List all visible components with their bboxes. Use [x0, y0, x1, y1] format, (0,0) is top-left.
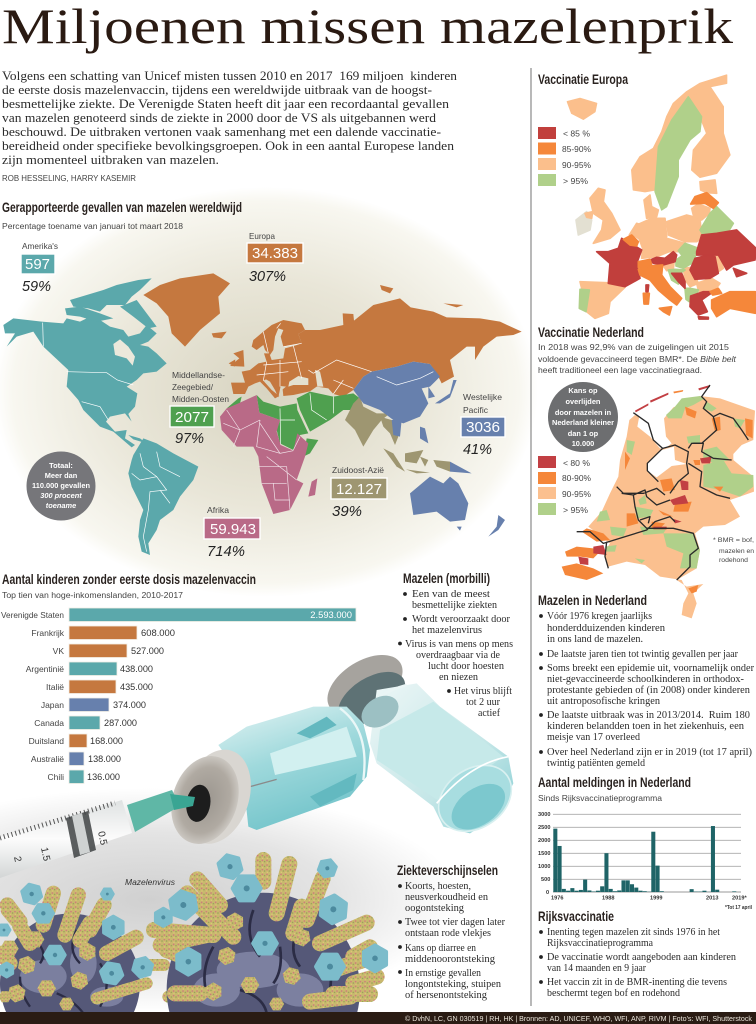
bullets: Mazelen in Nederland: in ons land de mazelen.: [547, 634, 643, 645]
region: Zuidoost-Azië: 39%: [332, 504, 362, 520]
callout: totaal: toename: [46, 501, 76, 510]
bullets: Rijksvaccinatie: Het vaccin zit in de BMR-inenting die tevens: [547, 977, 727, 988]
bullets: ziekteverschijnselen: Twee tot vier dagen later: [405, 917, 505, 928]
map: Continental Europe: [576, 180, 756, 319]
map background glow: [0, 187, 538, 597]
callout: sterftekans: [548, 382, 618, 452]
footnote: BMR: rodehond: [719, 557, 748, 564]
footer: © DvhN, LC, GN 030519 | RH, HK | Bronnen: AD, UNICEF, WHO, WFI, ANP, RIVM | Foto's: WFI, Shutterstock: [405, 1015, 752, 1023]
heading: world map: Gerapporteerde gevallen van mazelen wereldwijd: [2, 199, 242, 215]
region: Afrika: 59.943: [210, 522, 256, 538]
intro text: besmettelijke ziekte. De Verenigde Staten heeft dit jaar een recordaantal gevallen: [2, 97, 449, 111]
legend: Europe: > 95%: [563, 176, 588, 186]
footnote: BMR: mazelen en: [719, 548, 754, 555]
region: Zuidoost-Azië: [331, 465, 387, 520]
column chart: [538, 812, 752, 911]
country labels: Canada: [34, 718, 64, 728]
country labels: Japan: [41, 700, 64, 710]
region: Afrika: Afrika: [207, 505, 229, 515]
panel: Mazelen (morbilli): [398, 570, 513, 719]
bullets: Mazelen in Nederland: meisje van 17 overleed: [547, 732, 641, 743]
column chart: 2500: [538, 825, 550, 831]
bar values: 438.000: [120, 663, 153, 674]
country labels: Verenigde Staten: [1, 610, 64, 620]
bullets: Mazelen in Nederland: honderdduizenden kinderen: [547, 623, 666, 634]
bar values: [87, 609, 352, 782]
panel: bar chart: [1, 571, 356, 784]
illustration: syringe: 0.5: [95, 830, 109, 847]
intro text: Volgens een schatting van Unicef misten tussen 2010 en 2017 169 miljoen kinderen: [2, 69, 457, 83]
bullets: morbilli: overdraagbaar via de: [416, 650, 500, 661]
legend: Netherlands: 80-90%: [562, 473, 591, 483]
legend: Netherlands: [538, 456, 591, 515]
world map regions: [3, 273, 522, 555]
illustration: vial, front: [160, 707, 370, 853]
illustration: measles virus, right: [151, 853, 386, 1013]
bar values: 435.000: [120, 681, 153, 692]
bar values: 374.000: [113, 699, 146, 710]
callout: totaal: 110.000 gevallen: [32, 481, 90, 490]
bullets: ziekteverschijnselen: In ernstige gevallen: [405, 968, 482, 979]
bar values: 287.000: [104, 717, 137, 728]
panel: world map: [2, 199, 522, 560]
region: Amerika's: [21, 241, 58, 295]
bullets: ziekteverschijnselen: longontsteking, stuipen: [405, 979, 502, 990]
bullets: Rijksvaccinatie: Inenting tegen mazelen zit sinds 1976 in het: [547, 927, 720, 938]
callout: totaal: [26, 452, 96, 520]
footnote: BMR: [713, 537, 754, 564]
column chart: 2013: [706, 896, 718, 902]
country labels: Australië: [31, 754, 64, 764]
heading: ziekteverschijnselen: Ziekteverschijnselen: [397, 862, 498, 878]
illustration: syringe: [0, 790, 195, 878]
photo background shadow: [0, 788, 460, 1012]
region: Europa: 307%: [249, 269, 286, 285]
panel: Aantal meldingen: [538, 774, 752, 911]
country labels: Italië: [46, 682, 64, 692]
bullets: Rijksvaccinatie: De vaccinatie wordt aangeboden aan kinderen: [547, 952, 737, 963]
region: Europa: Europa: [249, 231, 275, 241]
bullets: morbilli: Een van de meest: [412, 589, 490, 600]
column chart: *Tot 17 april: [725, 905, 752, 911]
region: Westelijke Pacific: 41%: [463, 442, 492, 458]
illustration: vial, back: [317, 643, 524, 845]
callout: sterftekans: overlijden: [566, 397, 601, 406]
region: Westelijke Pacific: Pacific: [463, 405, 489, 415]
callout: sterftekans: Nederland kleiner: [552, 418, 614, 427]
column chart: 1976: [551, 896, 563, 902]
region: Middellandse-Zeegebied/Midden-Oosten: Midden-Oosten: [172, 394, 229, 404]
footnote: BMR: * BMR = bof,: [713, 537, 754, 544]
bullets: Mazelen in Nederland: De laatste uitbraak was in 2013/2014. Ruim 180: [547, 710, 750, 721]
region: Afrika: 714%: [207, 544, 245, 560]
bullets: morbilli: Het virus blijft: [454, 686, 512, 697]
region: Europa: 34.383: [252, 246, 298, 262]
illustration: measles virus, left: [0, 883, 200, 1013]
region: Westelijke Pacific: [461, 392, 505, 458]
subheading: Aantal meldingen: Sinds Rijksvaccinatieprogramma: [538, 793, 662, 803]
map: Netherlands: [562, 385, 755, 618]
legend: Europe: 85-90%: [562, 144, 591, 154]
bullets: morbilli: Wordt veroorzaakt door: [412, 614, 510, 625]
legend: Europe: 90-95%: [562, 160, 591, 170]
bar values: 168.000: [90, 735, 123, 746]
heading: morbilli: Mazelen (morbilli): [403, 570, 490, 586]
callout: totaal: Totaal:: [49, 461, 73, 470]
bullets: Mazelen in Nederland: twintig patiënten gemeld: [547, 758, 646, 769]
intro text: [2, 69, 457, 167]
callout: sterftekans: Kans op: [568, 386, 598, 395]
bar values: 527.000: [131, 645, 164, 656]
intro text: bereidheid onder specifieke bevolkingsgroepen. Ook in een aantal Europese landen: [2, 139, 454, 153]
region: Amerika's: 59%: [22, 279, 51, 295]
column chart: 2019*: [732, 896, 747, 902]
country labels: Argentinië: [26, 664, 64, 674]
bullets: morbilli: tot 2 uur: [466, 697, 500, 708]
bullets: morbilli: Virus is van mens op mens: [405, 639, 513, 650]
label: mazelenvirus: Mazelenvirus: [125, 878, 175, 887]
callout: totaal: Meer dan: [45, 471, 78, 480]
heading: Aantal meldingen: Aantal meldingen in Nederland: [538, 774, 691, 790]
column chart: 500: [541, 877, 550, 883]
bullets: morbilli: [398, 589, 513, 719]
bar values: 138.000: [88, 753, 121, 764]
bullets: Rijksvaccinatie: [539, 927, 737, 999]
heading: Vaccinatie Nederland: Vaccinatie Nederland: [538, 324, 644, 340]
bullets: morbilli: lucht door hoesten: [428, 661, 505, 672]
bullets: ziekteverschijnselen: Kans op diarree en: [405, 943, 477, 954]
column chart: 3000: [538, 812, 550, 818]
panel: Vaccinatie Europa: [538, 71, 756, 319]
footer: [0, 1012, 756, 1024]
region: Westelijke Pacific: 3036: [466, 420, 500, 436]
heading: Vaccinatie Europa: Vaccinatie Europa: [538, 71, 628, 87]
legend: Netherlands: > 95%: [563, 505, 588, 515]
bullets: ziekteverschijnselen: oogontsteking: [405, 903, 465, 914]
bullets: ziekteverschijnselen: ontstaan rode vlekjes: [405, 928, 491, 939]
legend: Netherlands: < 80 %: [563, 458, 590, 468]
bullets: Mazelen in Nederland: [539, 611, 754, 769]
bullets: Mazelen in Nederland: Over heel Nederland zijn er in 2019 (tot 17 april): [547, 747, 752, 758]
callout: sterftekans: door mazelen in: [555, 408, 612, 417]
panel: Rijksvaccinatie: [538, 908, 737, 999]
panel: Vaccinatie Nederland: [538, 324, 755, 618]
bullets: Mazelen in Nederland: niet-gevaccineerde schoolkinderen in orthodox-: [547, 674, 744, 685]
region: Middellandse-Zeegebied/Midden-Oosten: 97%: [175, 431, 204, 447]
bullets: Mazelen in Nederland: uit antroposofische kringen: [547, 696, 661, 707]
bullets: morbilli: actief: [478, 708, 500, 719]
bullets: Mazelen in Nederland: kinderen belandden toen in het ziekenhuis, een: [547, 721, 745, 732]
region: Westelijke Pacific: Westelijke: [463, 392, 502, 402]
country labels: [1, 610, 65, 782]
region: Middellandse-Zeegebied/Midden-Oosten: 2077: [175, 410, 209, 426]
intro text: zijn momenteel uitbraken van mazelen.: [2, 153, 219, 167]
bullets: morbilli: het mazelenvirus: [412, 625, 482, 636]
illustration: syringe: 2: [11, 855, 23, 863]
country labels: Duitsland: [29, 736, 64, 746]
region: Amerika's: Amerika's: [22, 241, 58, 251]
bullets: morbilli: en niezen: [439, 672, 479, 683]
region: Europa: [247, 231, 303, 285]
bullets: ziekteverschijnselen: neusverkoudheid en: [405, 892, 489, 903]
bullets: Mazelen in Nederland: Soms breekt een epidemie uit, voornamelijk onder: [547, 663, 754, 674]
subheading: bar chart: Top tien van hoge-inkomenslanden, 2010-2017: [2, 590, 183, 600]
column chart: 1999: [650, 896, 662, 902]
intro text: Nederland: [538, 342, 737, 375]
region: Amerika's: 597: [25, 257, 50, 273]
bullets: Mazelen in Nederland: protestante gebieden of (in 2008) onder kinderen: [547, 685, 751, 696]
bar values: 2.593.000: [310, 609, 352, 620]
bullets: Rijksvaccinatie: beschermt tegen bof en rodehond: [547, 988, 681, 999]
heading: bar chart: Aantal kinderen zonder eerste dosis mazelenvaccin: [2, 571, 256, 587]
intro text: Nederland: voldoende gevaccineerd tegen BMR*. De Bible belt: [538, 354, 737, 364]
intro text: Nederland: In 2018 was 92,9% van de zuigelingen uit 2015: [538, 342, 729, 352]
bullets: Rijksvaccinatie: van 14 maanden en 9 jaar: [547, 963, 646, 974]
callout: sterftekans: dan 1 op: [568, 429, 599, 438]
panel: Ziekteverschijnselen: [397, 862, 505, 1001]
country labels: Frankrijk: [31, 628, 65, 638]
illustration: syringe: 1.5: [38, 846, 52, 863]
bullets: ziekteverschijnselen: of hersenontsteking: [405, 990, 488, 1001]
bullets: Rijksvaccinatie: Rijksvaccinatieprogramma: [547, 938, 653, 949]
region: Afrika: [204, 505, 260, 560]
bullets: ziekteverschijnselen: middenoorontsteking: [405, 954, 496, 965]
heading: Mazelen in Nederland: Mazelen in Nederland: [538, 592, 647, 608]
intro text: Nederland: heeft traditioneel een lage vaccinatiegraad.: [538, 365, 702, 375]
intro text: de eerste dosis mazelenvaccin, tijdens een wereldwijde uitbraak van de hoogst-: [2, 83, 432, 97]
bullets: morbilli: besmettelijke ziekten: [412, 600, 498, 611]
bullets: ziekteverschijnselen: Koorts, hoesten,: [405, 881, 471, 892]
country labels: VK: [53, 646, 64, 656]
region: Middellandse-Zeegebied/Midden-Oosten: [170, 370, 229, 447]
column chart: 1988: [602, 896, 614, 902]
panel: Mazelen in Nederland: [538, 592, 754, 769]
legend: Europe: [538, 127, 591, 186]
column chart: 1500: [538, 851, 550, 857]
bar values: 608.000: [141, 627, 175, 638]
bullets: ziekteverschijnselen: [398, 881, 505, 1001]
bullets: Mazelen in Nederland: Vóór 1976 kregen jaarlijks: [547, 611, 652, 622]
legend: Europe: < 85 %: [563, 128, 590, 138]
region: Middellandse-Zeegebied/Midden-Oosten: Middellandse-: [172, 370, 225, 380]
legend: Netherlands: 90-95%: [562, 489, 591, 499]
heading: Rijksvaccinatie: Rijksvaccinatie: [538, 908, 614, 924]
column chart: 1000: [538, 864, 550, 870]
region: Zuidoost-Azië: Zuidoost-Azië: [332, 465, 384, 475]
intro text: beschouwd. De uitbraken vertonen vaak samenhang met een dalende vaccinatie-: [2, 125, 441, 139]
column chart: 0: [546, 890, 549, 896]
region: Zuidoost-Azië: 12.127: [336, 482, 382, 498]
bar values: 136.000: [87, 771, 120, 782]
callout: sterftekans: 10.000: [572, 439, 594, 448]
country labels: Chili: [47, 772, 64, 782]
column chart: 2000: [538, 838, 550, 844]
region: Middellandse-Zeegebied/Midden-Oosten: Zeegebied/: [172, 382, 214, 392]
callout: totaal: 300 procent: [40, 491, 82, 500]
bullets: Mazelen in Nederland: De laatste jaren tien tot twintig gevallen per jaar: [547, 649, 738, 660]
intro text: van mazelen genoteerd sinds de ziekte in 2000 door de VS als uitgebannen werd: [2, 111, 437, 125]
map: Iceland and Scandinavia: [567, 75, 730, 210]
subheading: world map: Percentage toename van januari tot maart 2018: [2, 221, 183, 231]
byline: ROB HESSELING, HARRY KASEMIR: [2, 173, 136, 183]
bars: [69, 608, 356, 784]
